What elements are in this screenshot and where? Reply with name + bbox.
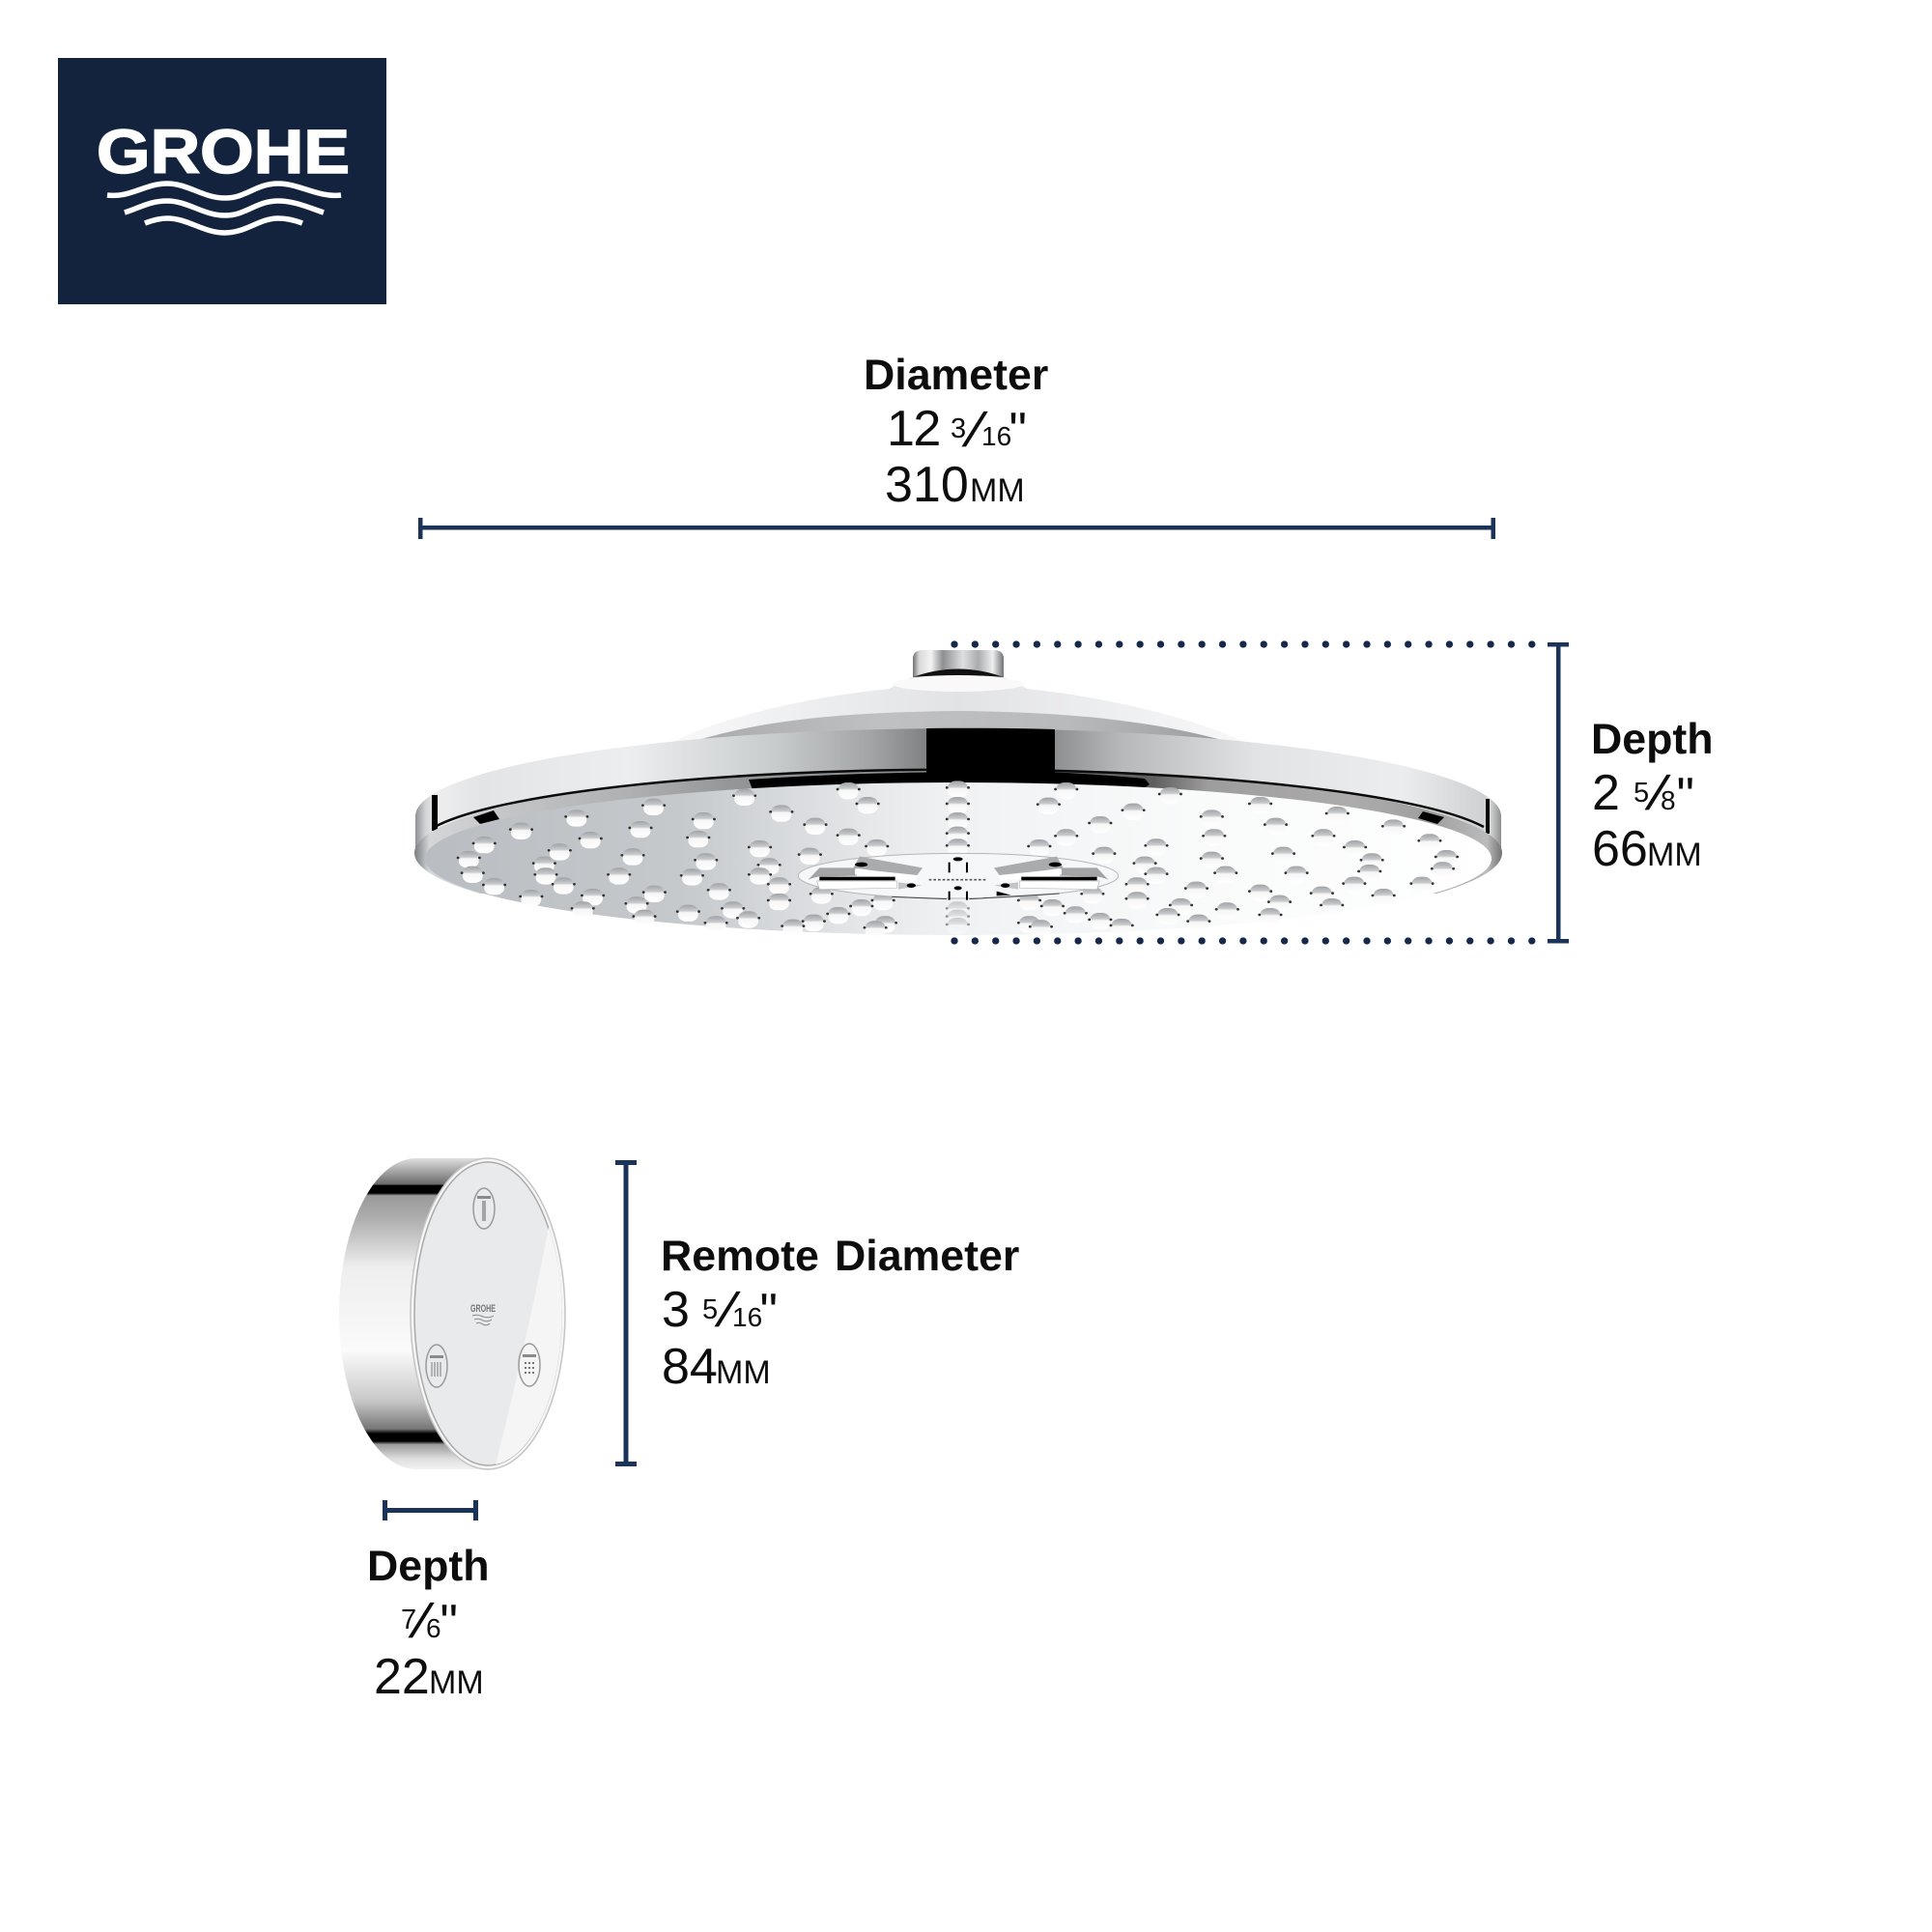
small reflections <box>473 810 1444 824</box>
spray face <box>425 782 1492 935</box>
heading: diameter dimension: 16 <box>981 421 1011 451</box>
logo wordmark: GROHE <box>97 117 350 186</box>
text: remote depth <box>367 1543 490 1705</box>
dimension line: remote diameter <box>615 1160 637 1466</box>
text: shower depth: ⁄ <box>1645 765 1671 821</box>
text: shower depth: 2 <box>1592 765 1620 821</box>
shower head reflection block <box>749 728 1150 792</box>
heading: diameter dimension: 3 <box>951 413 966 444</box>
dimension line: diameter <box>418 518 1495 539</box>
heading: diameter dimension: ⁄ <box>962 402 988 458</box>
heading: diameter dimension <box>864 352 1048 513</box>
text: remote diameter: 3 <box>662 1282 690 1338</box>
remote button: right <box>519 1344 540 1386</box>
text: remote depth: 22 <box>374 1649 430 1705</box>
dotted guide: bottom <box>952 938 1535 944</box>
text: remote depth: 6 <box>426 1613 441 1643</box>
dimension line: remote depth <box>383 1500 478 1520</box>
text: remote depth: MM <box>429 1664 484 1701</box>
remote face <box>411 1158 565 1469</box>
text: remote diameter: " <box>759 1284 778 1340</box>
text: remote diameter <box>661 1233 1019 1395</box>
text: shower depth <box>1591 716 1714 877</box>
text: remote diameter: 84 <box>662 1339 718 1395</box>
dotted guide: top <box>952 641 1535 647</box>
text: shower depth: Depth <box>1591 716 1714 763</box>
text: remote depth: ⁄ <box>409 1593 435 1649</box>
spray nozzles <box>457 781 1459 938</box>
remote logo: GROHE <box>470 1303 496 1315</box>
heading: diameter dimension: 310 <box>885 457 969 513</box>
text: shower depth: MM <box>1647 837 1702 873</box>
shower head <box>414 650 1502 938</box>
shower head rim band <box>415 728 1501 904</box>
remote button: left <box>426 1345 447 1387</box>
text: shower depth: 5 <box>1634 778 1649 809</box>
text: remote diameter: Remote <box>661 1233 819 1280</box>
text: remote depth: " <box>440 1595 458 1651</box>
text: remote depth: Depth <box>367 1543 490 1590</box>
heading: diameter dimension: MM <box>970 472 1025 509</box>
text: shower depth: 8 <box>1661 785 1676 815</box>
text: remote diameter: MM <box>716 1354 771 1391</box>
remote control <box>339 1158 565 1469</box>
text: remote depth: 7 <box>401 1605 416 1635</box>
remote logo <box>470 1303 496 1325</box>
dimension line: shower depth <box>1548 642 1569 943</box>
heading: diameter dimension: 12 <box>887 401 940 457</box>
shower head connector <box>673 650 1244 742</box>
remote button: top <box>473 1188 495 1229</box>
heading: diameter dimension: " <box>1009 403 1027 459</box>
text: shower depth: 66 <box>1592 821 1648 877</box>
text: shower depth: " <box>1677 768 1694 824</box>
text: remote diameter: ⁄ <box>715 1282 741 1338</box>
logo waves <box>107 184 341 233</box>
text: remote diameter: 16 <box>732 1302 762 1332</box>
shower head chrome ring <box>414 768 1502 894</box>
heading: diameter dimension: Diameter <box>864 352 1048 399</box>
logo: GROHE <box>58 58 386 304</box>
text: remote diameter: Diameter <box>835 1233 1019 1280</box>
central spray selector <box>798 853 1119 900</box>
remote body <box>339 1158 488 1469</box>
text: remote diameter: 5 <box>702 1294 718 1325</box>
